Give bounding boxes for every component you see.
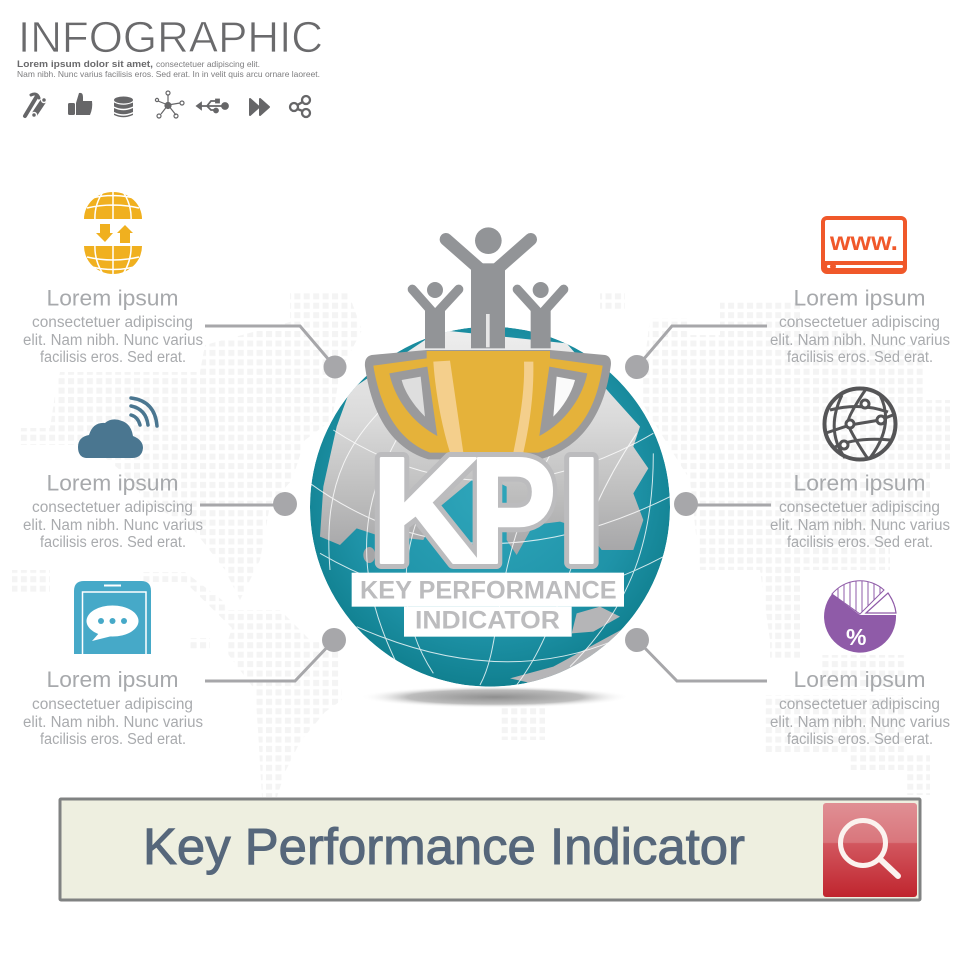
heading: Lorem ipsum [794, 470, 926, 496]
body text: facilisis eros. Sed erat. [787, 534, 933, 551]
icon: network globe [824, 388, 896, 460]
subtitle banner: KEY PERFORMANCE [360, 576, 617, 604]
heading: Lorem ipsum [794, 286, 926, 310]
body text [770, 696, 950, 748]
icon: www browser: www. [829, 228, 898, 256]
icon: percent pie: % [846, 624, 866, 650]
body text: elit. Nam nibh. Nunc varius [23, 332, 203, 349]
heading: Lorem ipsum [794, 667, 926, 692]
KPI letters: P [469, 425, 556, 595]
body text: consectetuer adipiscing [779, 314, 940, 331]
body text: elit. Nam nibh. Nunc varius [770, 517, 950, 534]
heading: Lorem ipsum [46, 667, 178, 692]
panel: top left item [23, 190, 203, 366]
globe land masses [320, 330, 648, 687]
person: centre [446, 227, 531, 348]
person: left [412, 282, 459, 348]
body text [23, 314, 203, 366]
connector: bottom right [625, 628, 767, 681]
title: INFOGRAPHIC [18, 13, 323, 62]
body text: elit. Nam nibh. Nunc varius [770, 332, 950, 349]
body text [770, 314, 950, 366]
heading: Lorem ipsum [46, 286, 178, 310]
body text: facilisis eros. Sed erat. [787, 731, 933, 748]
trophy outline [365, 350, 611, 459]
trophy highlights [433, 361, 533, 453]
connector: top right [625, 326, 767, 379]
icon: cloud with signal [78, 398, 157, 458]
body text: consectetuer adipiscing [779, 696, 940, 713]
icon: network nodes [155, 91, 184, 118]
heading: Lorem ipsum [46, 470, 178, 496]
connector: bottom left [205, 628, 346, 681]
body text [23, 696, 203, 748]
title: consectetuer adipiscing elit. [156, 60, 260, 69]
icon: globe exchange [84, 190, 142, 276]
KPI letters [371, 425, 602, 596]
globe [310, 327, 670, 687]
body text: consectetuer adipiscing [32, 499, 193, 516]
connector: middle right [674, 492, 771, 516]
body text: facilisis eros. Sed erat. [40, 731, 186, 748]
subtitle banner: INDICATOR [415, 606, 560, 634]
icon: phone chat [74, 581, 151, 654]
connector: middle left [200, 492, 297, 516]
body text: elit. Nam nibh. Nunc varius [23, 517, 203, 534]
KPI letters: K [371, 427, 481, 596]
title: Lorem ipsum dolor sit amet, [17, 59, 153, 69]
body text: facilisis eros. Sed erat. [40, 349, 186, 366]
icon row [25, 91, 310, 118]
KPI letters: P [469, 425, 556, 595]
icon: www browser [823, 218, 905, 272]
trophy [365, 227, 611, 459]
icon: usb [197, 100, 228, 112]
title: Nam nibh. Nunc varius facilisis eros. Sed erat. In in velit quis arcu ornare laoreet. [17, 69, 320, 79]
ground shadow [360, 686, 630, 708]
globe grid lines [312, 413, 670, 686]
body text [770, 499, 950, 551]
trophy cup [373, 351, 603, 453]
body text: facilisis eros. Sed erat. [40, 534, 186, 551]
connector: top left [205, 326, 346, 378]
body text: consectetuer adipiscing [32, 314, 193, 331]
body text: elit. Nam nibh. Nunc varius [770, 714, 950, 731]
central KPI emblem [310, 227, 670, 687]
body text [23, 499, 203, 551]
body text: consectetuer adipiscing [32, 696, 193, 713]
panel: bottom right item [770, 578, 950, 748]
dotted world map background [12, 292, 950, 797]
icon: fast forward [250, 99, 269, 115]
icon: percent pie [824, 578, 896, 653]
KPI letters: K [371, 427, 481, 596]
icon: share [290, 96, 310, 117]
panel: middle right item [770, 388, 950, 551]
panel: bottom left item [23, 581, 203, 748]
panel: middle left item [23, 398, 203, 551]
KPI letters: I [560, 427, 602, 596]
body text: facilisis eros. Sed erat. [787, 349, 933, 366]
icon: database [114, 96, 133, 117]
subtitle banner [352, 573, 624, 637]
KPI letters: I [560, 427, 602, 596]
search bar label: Key Performance Indicator [143, 818, 745, 875]
search button [823, 803, 917, 897]
body text: elit. Nam nibh. Nunc varius [23, 714, 203, 731]
body text: consectetuer adipiscing [779, 499, 940, 516]
icon: thumbs up [68, 93, 92, 115]
trophy handle left [389, 367, 437, 436]
people on trophy [412, 227, 564, 348]
search bar [60, 799, 920, 900]
trophy handle right [539, 367, 587, 436]
person: right [517, 282, 564, 348]
icon: wrench [25, 94, 46, 118]
panel: top right item [770, 218, 950, 366]
